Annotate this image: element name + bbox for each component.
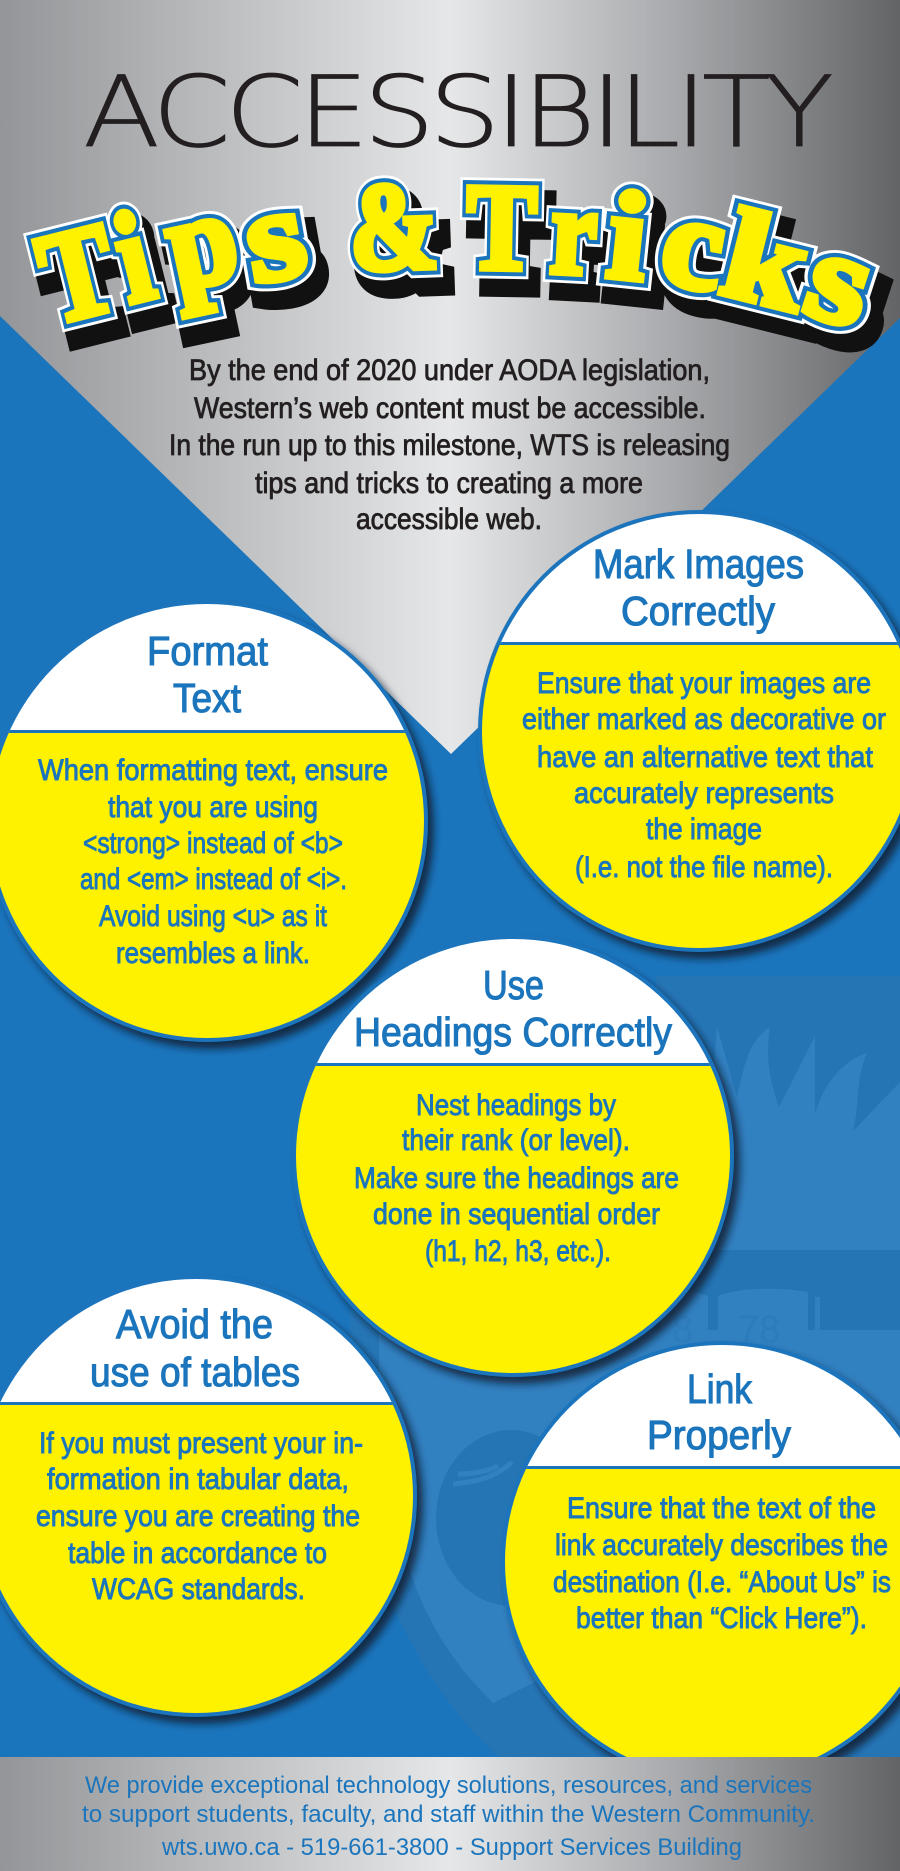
- title: Tips & Tricks: i: [110, 199, 174, 345]
- title: Tips & Tricks: r: [548, 163, 600, 301]
- title: Tips & Tricks: T: [25, 195, 130, 351]
- title: Tips & Tricks: k: [719, 199, 832, 354]
- title: Tips & Tricks: s: [800, 219, 899, 371]
- title: Tips & Tricks: T: [25, 195, 130, 351]
- heading: Use Headings Correctly: [354, 962, 672, 1055]
- title: Tips & Tricks: s: [234, 160, 315, 311]
- watermark: university crest: 8: [672, 1309, 693, 1351]
- title: Tips & Tricks: [25, 157, 899, 371]
- intro text: accessible web.: [356, 503, 542, 536]
- panel: Link Properly: [495, 1335, 900, 1788]
- panel: Avoid the use of tables: [0, 1270, 430, 1724]
- text: Avoid tables body: WCAG standards.: [92, 1573, 305, 1606]
- title: Tips & Tricks: &: [347, 157, 440, 298]
- title: Tips & Tricks: T: [34, 210, 139, 366]
- title: Tips & Tricks: k: [710, 184, 823, 339]
- heading: Use Headings Correctly: Use: [483, 962, 544, 1008]
- watermark: university crest: [350, 976, 900, 1757]
- text: Format Text body: Avoid using <u> as it: [99, 900, 328, 933]
- text: Use Headings body: their rank (or level).: [402, 1124, 630, 1157]
- text: Mark Images body: [522, 667, 886, 884]
- title: Tips & Tricks: r: [548, 163, 600, 301]
- intro text: By the end of 2020 under AODA legislation,: [189, 354, 710, 387]
- heading: Format Text: Format: [147, 628, 269, 674]
- title: Tips & Tricks: i: [611, 182, 663, 323]
- heading: Format Text: Text: [173, 675, 242, 721]
- title: Tips & Tricks: s: [791, 204, 890, 356]
- title: Tips & Tricks: r: [557, 178, 609, 316]
- title: Tips & Tricks: i: [602, 167, 654, 308]
- heading: Mark Images Correctly: Correctly: [621, 588, 775, 634]
- title: Tips & Tricks: &: [356, 172, 449, 313]
- title: Tips & Tricks: k: [710, 184, 823, 339]
- title: Tips & Tricks: c: [652, 167, 736, 319]
- title: Tips & Tricks: T: [25, 195, 130, 351]
- footer text: [82, 1772, 815, 1861]
- title: Tips & Tricks: T: [475, 173, 547, 311]
- title: Tips & Tricks: &: [347, 157, 440, 298]
- intro text: Western’s web content must be accessible.: [194, 392, 706, 425]
- title: Tips & Tricks: c: [652, 167, 736, 319]
- heading: Avoid the use of tables: [90, 1301, 300, 1395]
- panel: Mark Images Correctly: [470, 500, 900, 964]
- title: Tips & Tricks: i: [101, 184, 165, 330]
- title: Tips & Tricks: s: [243, 175, 324, 326]
- heading: Format Text: [147, 628, 269, 721]
- silver header wedge: [0, 0, 900, 754]
- text: Format Text body: [38, 754, 388, 970]
- title: Tips & Tricks: p: [153, 164, 249, 318]
- title: Tips & Tricks: r: [548, 163, 600, 301]
- text: Use Headings body: done in sequential order: [373, 1198, 660, 1231]
- intro text: [169, 354, 730, 536]
- panel: Format Text: [0, 590, 440, 1052]
- text: Format Text body: that you are using: [108, 791, 318, 824]
- intro text: tips and tricks to creating a more: [255, 467, 643, 500]
- text: Mark Images body: accurately represents: [574, 777, 834, 810]
- heading: Link Properly: Link: [687, 1366, 752, 1412]
- text: Format Text body: When formatting text, ensure: [38, 754, 388, 787]
- text: Link Properly body: better than “Click Here”).: [576, 1602, 867, 1635]
- text: Avoid tables body: table in accordance to: [68, 1537, 327, 1570]
- text: Avoid tables body: ensure you are creating the: [36, 1500, 360, 1533]
- text: Avoid tables body: If you must present your in-: [39, 1427, 363, 1460]
- title: Tips & Tricks: p: [153, 164, 249, 318]
- title: Tips & Tricks: i: [101, 184, 165, 330]
- title: Tips & Tricks: s: [791, 204, 890, 356]
- text: Format Text body: and <em> instead of <i>.: [80, 863, 347, 896]
- heading: Use Headings Correctly: Headings Correctly: [354, 1009, 672, 1055]
- footer text: to support students, faculty, and staff within the Western Community.: [82, 1801, 815, 1828]
- title: Tips & Tricks: s: [234, 160, 315, 311]
- title: Tips & Tricks: T: [466, 158, 538, 296]
- text: Avoid tables body: formation in tabular data,: [47, 1463, 349, 1496]
- text: Use Headings body: Make sure the headings are: [354, 1162, 679, 1195]
- heading: Mark Images Correctly: Mark Images: [593, 541, 804, 587]
- text: Format Text body: <strong> instead of <b>: [83, 827, 343, 860]
- text: Use Headings body: [354, 1089, 679, 1268]
- footer text: wts.uwo.ca - 519-661-3800 - Support Services Building: [161, 1834, 742, 1861]
- footer text: We provide exceptional technology solutions, resources, and services: [85, 1772, 812, 1799]
- title: ACCESSIBILITY: ACCESSIBILITY: [83, 56, 832, 170]
- watermark: university crest: 78: [738, 1309, 780, 1351]
- heading: Link Properly: Properly: [647, 1412, 791, 1458]
- title: Tips & Tricks: T: [466, 158, 538, 296]
- panel: Use Headings Correctly: [285, 925, 745, 1385]
- text: Format Text body: resembles a link.: [116, 937, 310, 970]
- title: Tips & Tricks: p: [162, 179, 258, 333]
- text: Avoid tables body: [36, 1427, 363, 1606]
- text: Use Headings body: (h1, h2, h3, etc.).: [425, 1235, 611, 1268]
- text: Mark Images body: (I.e. not the file name).: [575, 851, 833, 884]
- title: Tips & Tricks: s: [791, 204, 890, 356]
- title: Tips & Tricks: i: [602, 167, 654, 308]
- heading: Avoid the use of tables: Avoid the: [116, 1301, 273, 1347]
- title: Tips & Tricks: k: [710, 184, 823, 339]
- title: Tips & Tricks: c: [652, 167, 736, 319]
- title: Tips & Tricks: c: [661, 182, 745, 334]
- title: Tips & Tricks: i: [602, 167, 654, 308]
- heading: Link Properly: [647, 1366, 791, 1458]
- intro text: In the run up to this milestone, WTS is releasing: [169, 429, 730, 462]
- text: Mark Images body: have an alternative text that: [537, 741, 874, 774]
- text: Use Headings body: Nest headings by: [416, 1089, 616, 1122]
- title: Tips & Tricks: &: [347, 157, 440, 298]
- title: Tips & Tricks: s: [234, 160, 315, 311]
- title: Tips & Tricks: T: [466, 158, 538, 296]
- text: Link Properly body: [553, 1492, 891, 1635]
- footer band: [0, 1757, 900, 1871]
- title: Tips & Tricks: i: [101, 184, 165, 330]
- text: Mark Images body: the image: [646, 813, 762, 846]
- heading: Avoid the use of tables: use of tables: [90, 1349, 300, 1395]
- heading: Mark Images Correctly: [593, 541, 804, 634]
- title: Tips & Tricks: p: [153, 164, 249, 318]
